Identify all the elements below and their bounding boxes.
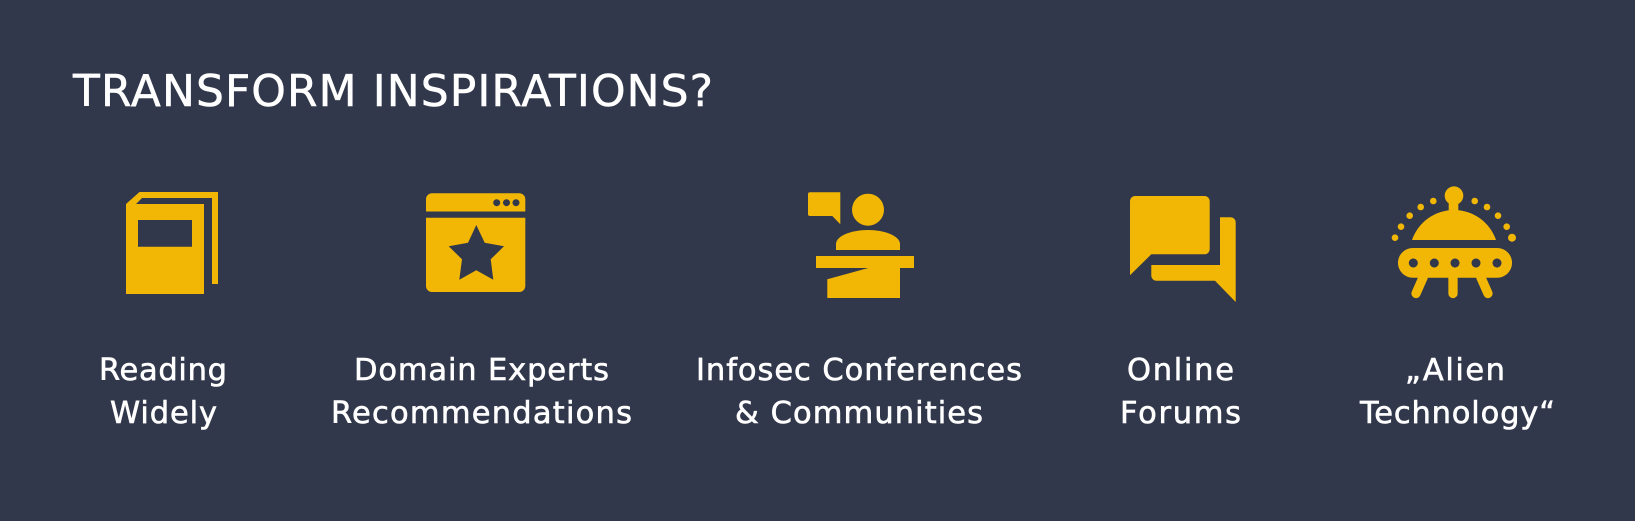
panel: alien technology [1359, 186, 1555, 431]
label: reading widely: Reading [99, 353, 227, 388]
label: alien technology [1359, 353, 1555, 431]
panel: infosec conferences and communities [696, 192, 1022, 431]
icon: speech bubbles [1130, 196, 1236, 302]
label: online forums: Forums [1120, 396, 1241, 431]
label: reading widely [99, 353, 227, 431]
label: domain experts recommendations: Recommendations [331, 396, 632, 431]
label: infosec conferences and communities: Infosec Conferences [696, 353, 1022, 388]
label: alien technology: „Alien [1405, 353, 1505, 388]
label: alien technology: Technology“ [1359, 396, 1555, 431]
icon: presenter at lectern [808, 192, 914, 298]
label: infosec conferences and communities [696, 353, 1022, 431]
label: online forums [1120, 353, 1241, 431]
label: domain experts recommendations: Domain Experts [354, 353, 609, 388]
label: online forums: Online [1127, 353, 1234, 388]
icon: browser window with star [426, 193, 525, 292]
panel: online forums [1120, 196, 1241, 431]
panel: reading widely [99, 192, 227, 431]
icon: book [126, 192, 218, 294]
icon: ufo [1392, 186, 1516, 294]
panel: domain experts recommendations [331, 193, 632, 431]
label: domain experts recommendations [331, 353, 632, 431]
label: infosec conferences and communities: & Communities [735, 396, 983, 431]
title: TRANSFORM INSPIRATIONS? [72, 66, 713, 117]
label: reading widely: Widely [110, 396, 217, 431]
